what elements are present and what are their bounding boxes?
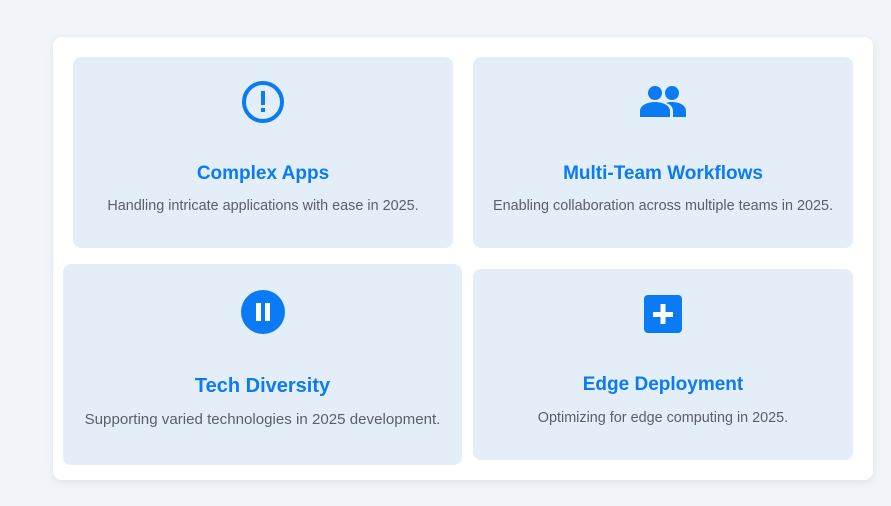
title: Complex Apps	[197, 163, 329, 184]
panel: multi-team workflows	[473, 57, 853, 248]
icon: plus square	[644, 295, 682, 333]
icon: people	[640, 86, 686, 117]
description: Optimizing for edge computing in 2025.	[538, 410, 788, 426]
title: Edge Deployment	[583, 374, 743, 395]
description: Handling intricate applications with ease in 2025.	[107, 198, 419, 214]
title: Multi-Team Workflows	[563, 163, 763, 184]
title: Tech Diversity	[195, 375, 330, 397]
panel: tech diversity	[63, 264, 462, 465]
icon: exclamation circle	[242, 81, 284, 123]
description: Enabling collaboration across multiple teams in 2025.	[493, 198, 833, 214]
icon: pause circle	[241, 290, 285, 334]
panel: complex apps	[73, 57, 453, 248]
description: Supporting varied technologies in 2025 development.	[85, 411, 440, 428]
panel: edge deployment	[473, 269, 853, 460]
